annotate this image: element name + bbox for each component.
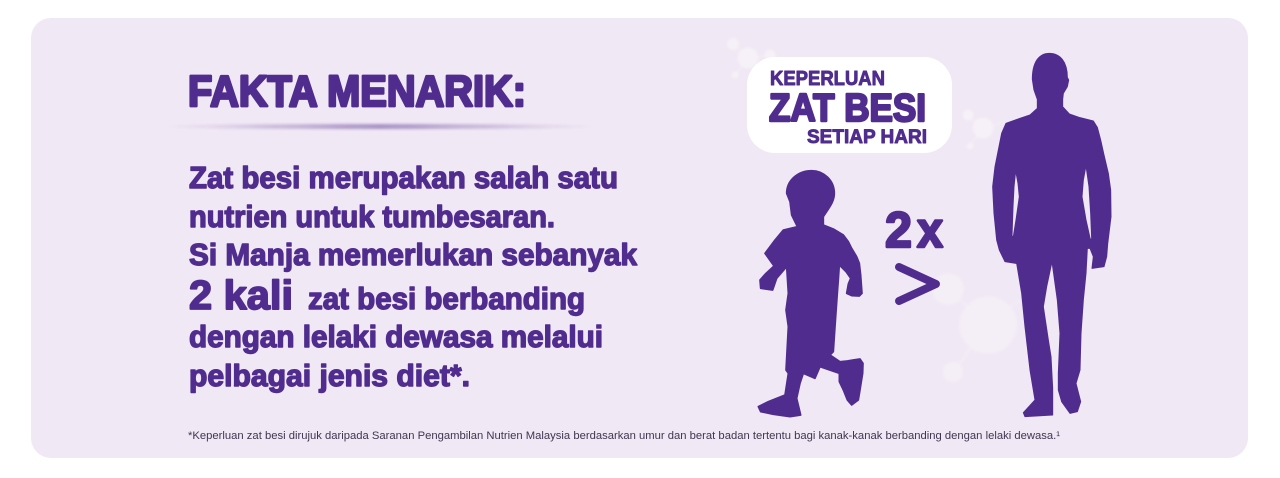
label: 2x: 2 (885, 202, 912, 258)
label: 2x (885, 202, 943, 258)
icon: greater-than sign (899, 267, 936, 301)
text block: main fact: nutrien untuk tumbesaran. (189, 200, 555, 234)
decoration: molecule top left of bubble (727, 38, 776, 78)
icon: adult man silhouette (993, 53, 1111, 417)
heading underline (165, 124, 595, 129)
text block: main fact: pelbagai jenis diet*. (189, 359, 470, 393)
label: 2x: x (917, 202, 943, 258)
text block: main fact (189, 161, 637, 393)
text block: main fact: Si Manja memerlukan sebanyak (189, 238, 637, 272)
decoration: molecule right of bubble (962, 110, 1005, 150)
callout: daily iron requirement bubble: SETIAP HARI (807, 126, 927, 148)
text block: main fact: 2 kali (189, 272, 293, 318)
callout: daily iron requirement bubble: KEPERLUAN (770, 68, 885, 90)
callout: daily iron requirement bubble: ZAT BESI (769, 87, 926, 130)
icon: child running silhouette (758, 171, 863, 417)
text block: main fact: dengan lelaki dewasa melalui (189, 320, 603, 354)
callout: daily iron requirement bubble (747, 57, 952, 153)
text block: main fact: Zat besi merupakan salah satu (189, 161, 618, 195)
decoration: large molecule between figures (932, 273, 1020, 382)
text block: main fact: zat besi berbanding (308, 282, 585, 316)
footnote: *Keperluan zat besi dirujuk daripada Saranan Pengambilan Nutrien Malaysia berdasarkan umur dan berat badan tertentu bagi kanak-kanak berbanding dengan lelaki dewasa.¹ (188, 430, 1060, 442)
heading: Fakta Menarik: FAKTA MENARIK: (188, 67, 526, 116)
